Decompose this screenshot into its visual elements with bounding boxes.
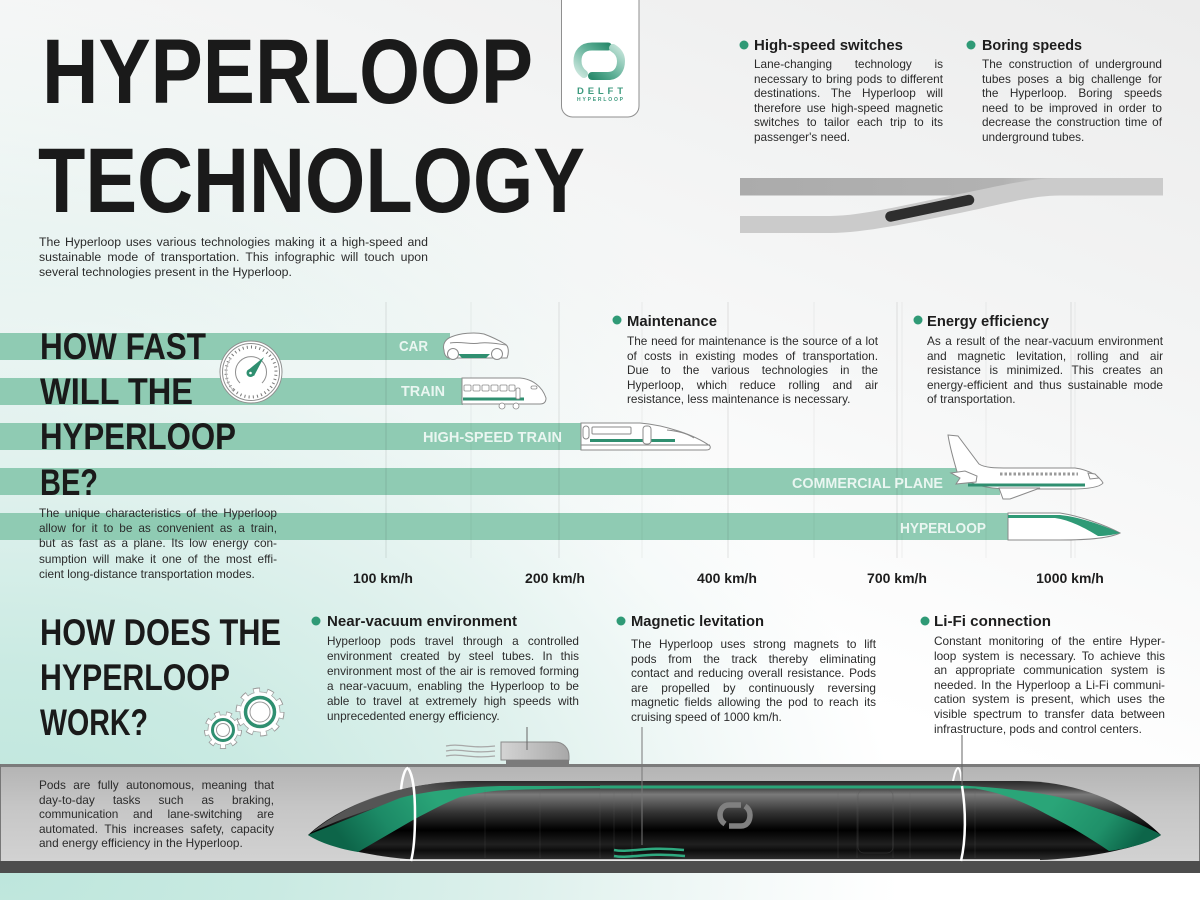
bar labels: [399, 338, 986, 537]
text: li-fi: Constant monitoring of the entire Hyper-: [934, 634, 1165, 648]
text: boring speeds: tubes poses a big challenge for: [982, 72, 1162, 86]
ring back arc right: [952, 768, 962, 788]
text: magnetic levitation: The Hyperloop uses strong magnets to lift: [631, 637, 876, 651]
heading: energy efficiency: Energy efficiency: [927, 314, 1049, 330]
intro text: [39, 235, 428, 279]
text: high-speed switches: passenger's need.: [754, 130, 850, 144]
title: HYPERLOOP: [42, 21, 533, 123]
heading: how fast: [40, 326, 236, 503]
levitation waves: [614, 849, 685, 857]
text: autonomous pods: automated. This increases safety, capacity: [39, 822, 274, 836]
text: li-fi: infrastructure, pods and control centers.: [934, 722, 1142, 736]
text: energy efficiency: energy-efficient and thus sustainable mode: [927, 378, 1163, 392]
text: maintenance: of costs in existing modes of transportation.: [627, 349, 878, 363]
text: li-fi: [934, 634, 1165, 736]
text: energy efficiency: and magnetic levitation, rolling and air: [927, 349, 1163, 363]
text: how fast: The unique characteristics of the Hyperloop: [39, 506, 277, 520]
text: how fast: allow for it to be as convenient as a train,: [39, 521, 277, 535]
logo card: Delft Hyperloop: DELFT: [577, 86, 623, 97]
leader: levitation: [641, 727, 643, 845]
heading: how fast: HYPERLOOP: [40, 416, 236, 457]
axis speed labels: 1000 km/h: [1036, 570, 1104, 586]
text: near-vacuum: able to travel at extremely high speeds with: [327, 694, 579, 708]
heading: how fast: WILL THE: [40, 371, 193, 412]
text: boring speeds: need to be improved in order to: [982, 101, 1162, 115]
title: [38, 21, 585, 232]
heading: high-speed switches: High-speed switches: [754, 38, 903, 54]
text: how fast: but as fast as a plane. Its low energy con-: [39, 536, 277, 550]
icon: car: [443, 333, 508, 360]
switch track diagram: [740, 178, 1163, 233]
ring front arc right: [961, 786, 965, 861]
text: near-vacuum: environment most of the air is removed forming: [327, 664, 579, 678]
text: autonomous pods: and energy efficiency in the Hyperloop.: [39, 836, 243, 850]
pod body: [308, 781, 1161, 860]
intro text: several technologies present in the Hyperloop.: [39, 265, 292, 279]
text: maintenance: resistance, less maintenance is necessary.: [627, 392, 850, 406]
panel lines: [485, 790, 975, 858]
speed bars: [0, 333, 1008, 540]
ring back arc left: [401, 768, 408, 790]
text: energy efficiency: of transportation.: [927, 392, 1016, 406]
axis speed labels: [353, 570, 1104, 586]
text: high-speed switches: [754, 57, 943, 144]
bar labels: COMMERCIAL PLANE: [792, 475, 943, 492]
text: magnetic levitation: magnetic fields allowing the pod to reach its: [631, 695, 876, 709]
bar labels: HIGH-SPEED TRAIN: [423, 429, 562, 446]
text: boring speeds: underground tubes.: [982, 130, 1084, 144]
axis speed labels: 700 km/h: [867, 570, 927, 586]
door: [858, 790, 893, 853]
heading: how does the hyperloop work: WORK?: [40, 702, 148, 743]
icon: hyperloop pod side view: [1008, 513, 1120, 540]
pod logo: [720, 805, 750, 826]
text: near-vacuum: unprecedented energy efficiency.: [327, 709, 500, 723]
speed chart grid lines: [386, 302, 1075, 558]
tube cross-section: [0, 764, 1200, 873]
bar labels: TRAIN: [401, 383, 445, 400]
text: high-speed switches: necessary to bring pods to different: [754, 72, 943, 86]
bar labels: HYPERLOOP: [900, 520, 986, 537]
intro text: sustainable mode of transportation. This infographic will touch upon: [39, 250, 428, 264]
logo card: Delft Hyperloop: [562, 0, 639, 117]
text: maintenance: The need for maintenance is the source of a lot: [627, 334, 878, 348]
axis speed labels: 400 km/h: [697, 570, 757, 586]
text: magnetic levitation: pods from the track thereby eliminating: [631, 652, 876, 666]
text: boring speeds: The construction of underground: [982, 57, 1162, 71]
text: boring speeds: [982, 57, 1162, 144]
bar labels: CAR: [399, 338, 428, 355]
text: near-vacuum: environment created by steel tubes. In this: [327, 649, 579, 663]
text: magnetic levitation: are propelled by continuously reversing: [631, 681, 876, 695]
text: how fast: sumption will make it one of the most effi-: [39, 552, 277, 566]
left green stripe: [308, 786, 620, 852]
text: magnetic levitation: [631, 637, 876, 724]
text: autonomous pods: [39, 778, 274, 850]
hyperloop pod: [308, 727, 1161, 861]
logo card: Delft Hyperloop: HYPERLOOP: [577, 97, 624, 103]
title: TECHNOLOGY: [38, 130, 585, 232]
heading: li-fi connection: Li-Fi connection: [934, 614, 1051, 630]
text: magnetic levitation: contact and reducing overall resistance. Pods: [631, 666, 876, 680]
text: li-fi: cation system is present, which uses the: [934, 692, 1165, 706]
icon: gears: [207, 691, 281, 746]
heading: boring speeds: Boring speeds: [982, 38, 1082, 54]
text: autonomous pods: day-to-day tasks such as braking,: [39, 793, 274, 807]
heading: how fast: BE?: [40, 462, 98, 503]
text: li-fi: loop system is necessary. To achieve this: [934, 649, 1165, 663]
text: autonomous pods: Pods are fully autonomous, meaning that: [39, 778, 274, 792]
text: high-speed switches: switches to tailor each trip to its: [754, 115, 943, 129]
heading: near-vacuum environment: Near-vacuum environment: [327, 614, 517, 630]
icon: train: [462, 378, 546, 409]
icon: speedometer: [216, 337, 286, 407]
text: energy efficiency: resistance is minimized. This creates an: [927, 363, 1163, 377]
nose highlight: [312, 781, 490, 832]
text: li-fi: visible spectrum to transfer data between: [934, 707, 1165, 721]
heading: how does the hyperloop work: HOW DOES THE: [40, 612, 281, 653]
icon: high-speed train: [581, 423, 710, 450]
text: high-speed switches: Lane-changing technology is: [754, 57, 943, 71]
heading: magnetic levitation: Magnetic levitation: [631, 614, 764, 630]
heading: how fast: HOW FAST: [40, 326, 206, 367]
text: near-vacuum: a near-vacuum, enabling the Hyperloop to be: [327, 679, 579, 693]
text: how fast: [39, 506, 277, 581]
heading: how does the hyperloop work: [40, 612, 281, 743]
text: near-vacuum: [327, 634, 579, 723]
text: maintenance: [627, 334, 878, 406]
text: li-fi: needed. In the Hyperloop a Li-Fi communi-: [934, 678, 1165, 692]
axis speed labels: 100 km/h: [353, 570, 413, 586]
text: maintenance: Due to the various technologies in the: [627, 363, 878, 377]
right green stripe: [600, 786, 1161, 851]
text: li-fi: an appropriate communication system is: [934, 663, 1165, 677]
heading: how does the hyperloop work: HYPERLOOP: [40, 657, 230, 698]
text: boring speeds: the Hyperloop. Boring speeds: [982, 86, 1162, 100]
text: magnetic levitation: cruising speed of 1000 km/h.: [631, 710, 782, 724]
floor highlight: [400, 859, 1040, 861]
text: how fast: cient long-distance transportation modes.: [39, 567, 255, 581]
heading: maintenance: Maintenance: [627, 314, 717, 330]
text: boring speeds: decrease the construction time of: [982, 115, 1162, 129]
icon: commercial plane: [948, 435, 1103, 499]
text: high-speed switches: therefore use high-speed magnetic: [754, 101, 943, 115]
text: maintenance: Hyperloop, which reduce rolling and air: [627, 378, 878, 392]
axis speed labels: 200 km/h: [525, 570, 585, 586]
vacuum pump icon: [446, 727, 569, 765]
text: near-vacuum: Hyperloop pods travel through a controlled: [327, 634, 579, 648]
text: high-speed switches: destinations. The Hyperloop will: [754, 86, 943, 100]
leader: li-fi: [961, 735, 963, 785]
text: energy efficiency: [927, 334, 1163, 406]
ring front arc left: [408, 768, 415, 861]
text: energy efficiency: As a result of the near-vacuum environment: [927, 334, 1163, 348]
intro text: The Hyperloop uses various technologies making it a high-speed and: [39, 235, 428, 249]
text: autonomous pods: communication and lane-switching are: [39, 807, 274, 821]
